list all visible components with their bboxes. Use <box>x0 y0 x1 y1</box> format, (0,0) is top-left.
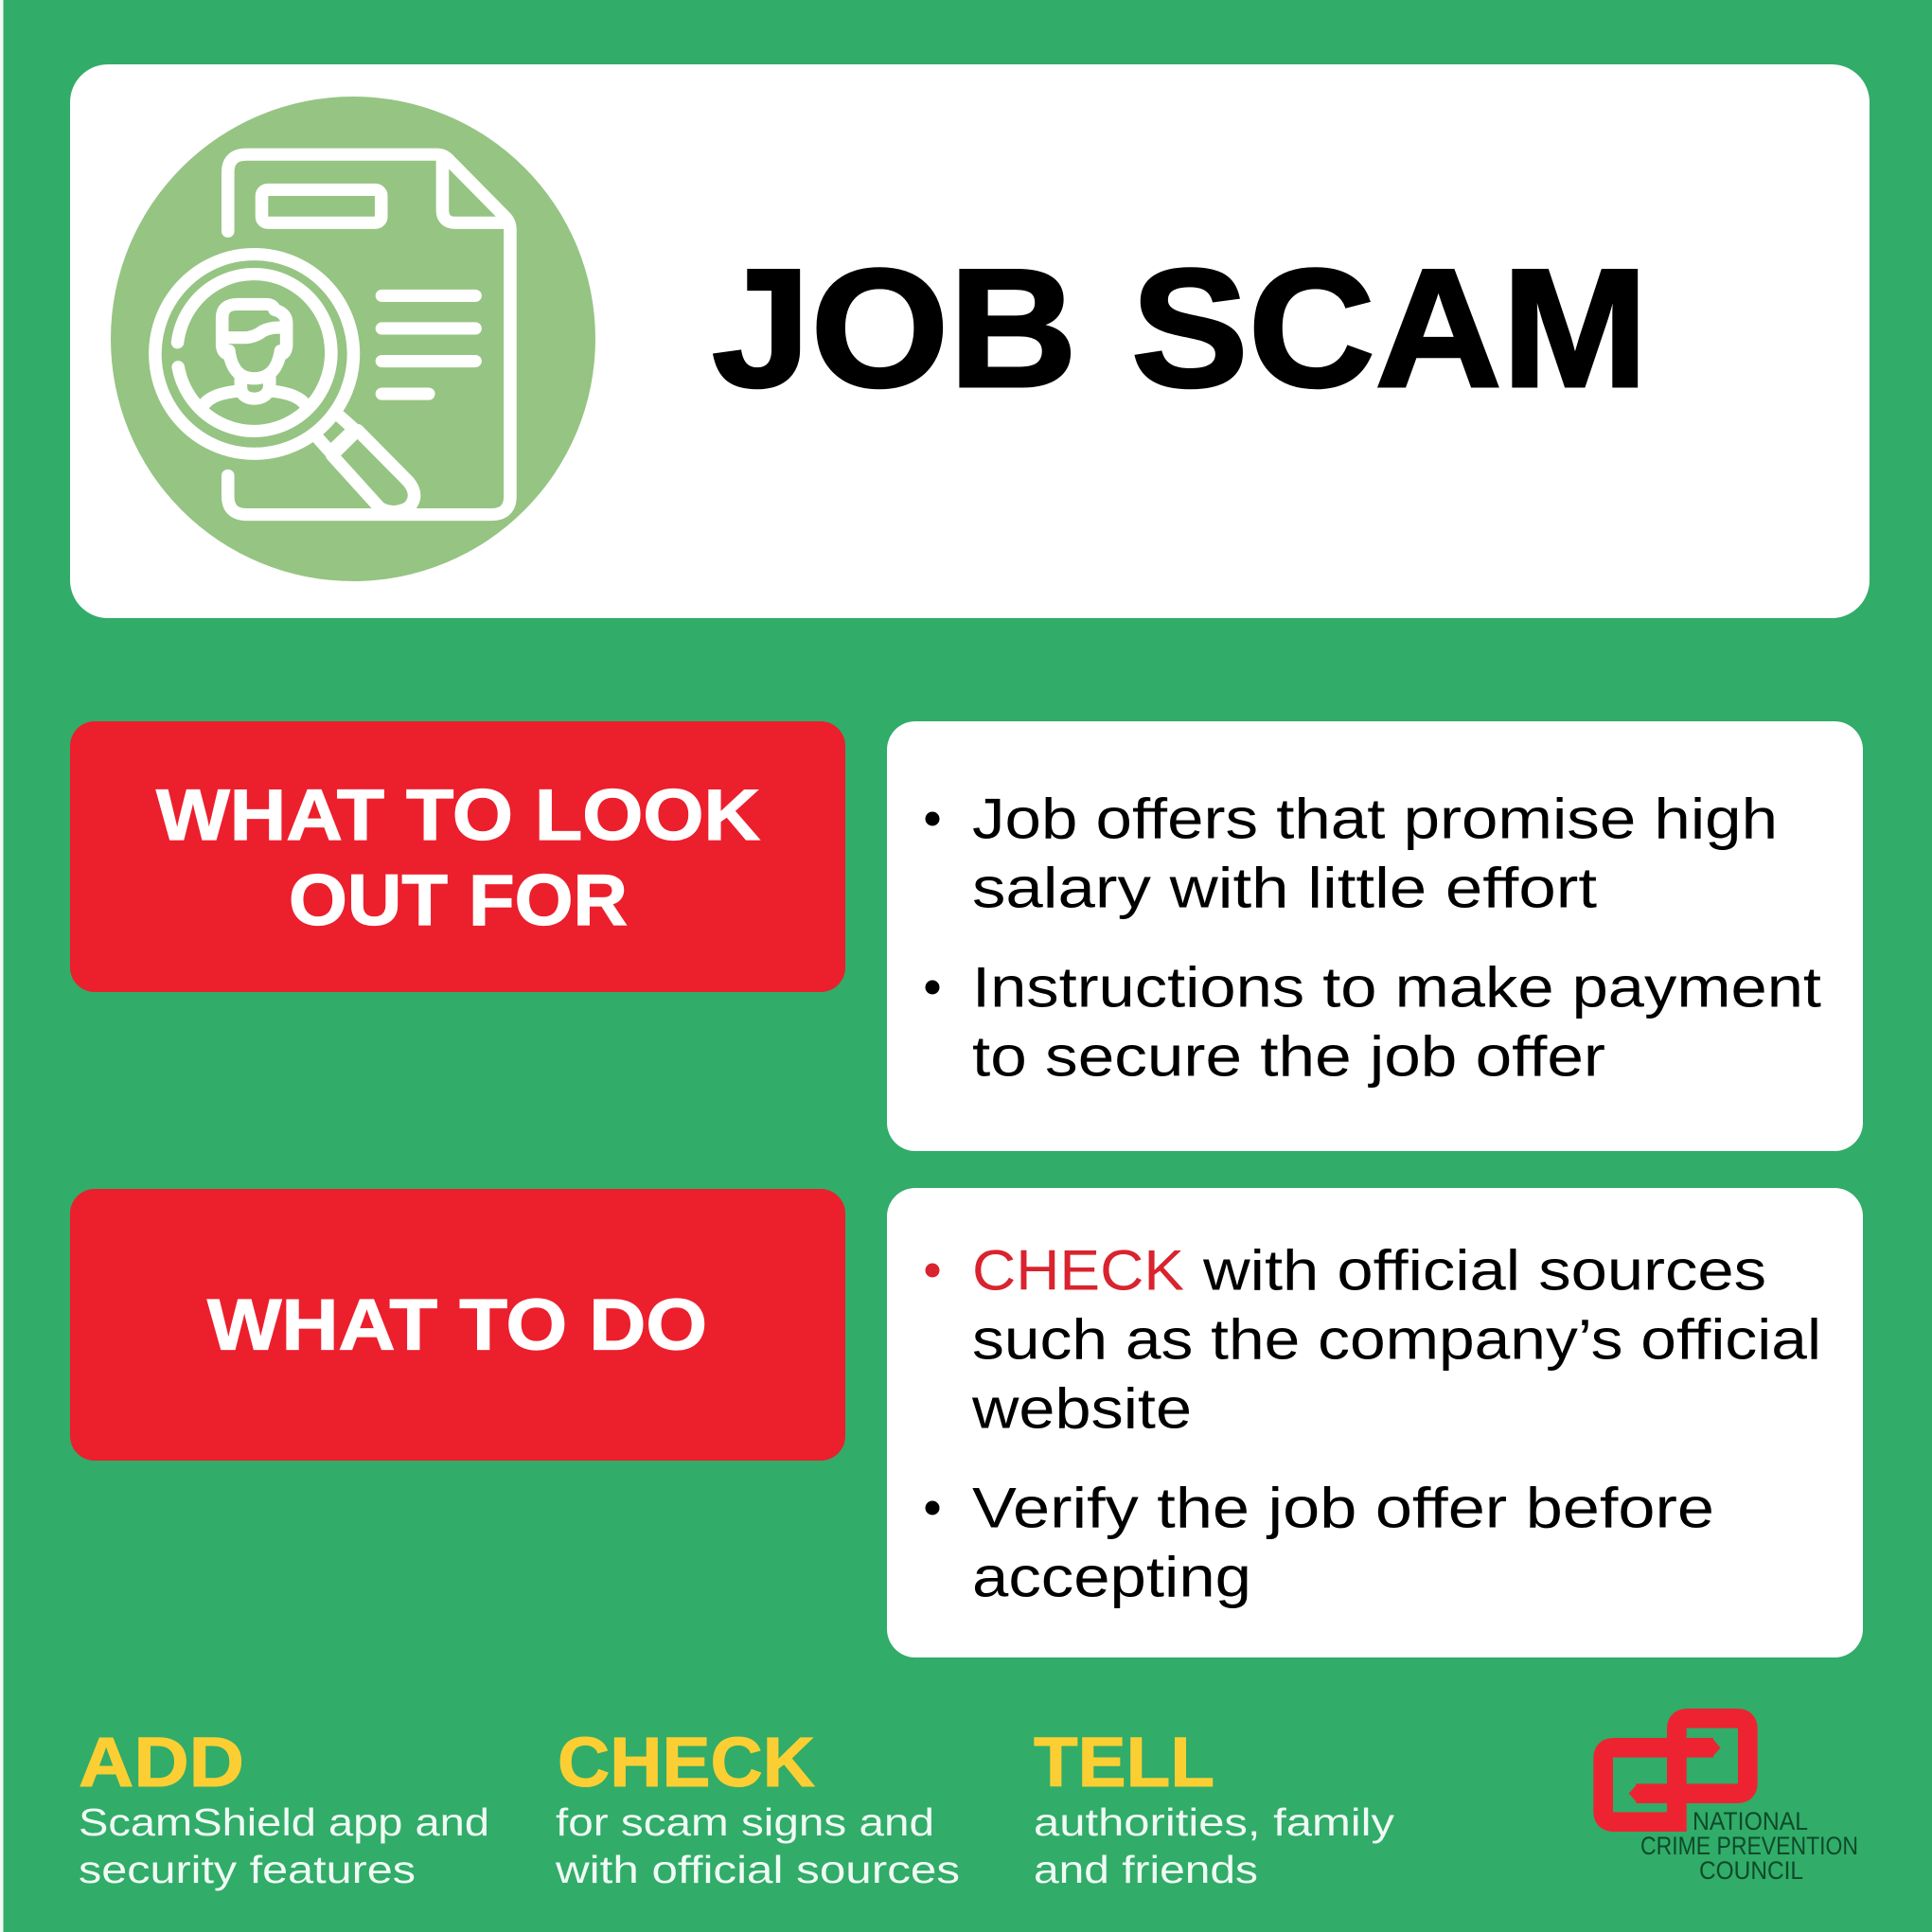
logo: National Crime Prevention Council: NATIONAL <box>1693 1807 1808 1835</box>
logo: National Crime Prevention Council: COUNCIL <box>1699 1856 1803 1885</box>
title: SCAM <box>1131 234 1648 422</box>
panel: what to do list: such as the company’s official <box>972 1308 1821 1371</box>
panel: what to look out for list: Instructions to make payment <box>972 956 1821 1019</box>
panel: what to look out for list: salary with little effort <box>972 856 1597 920</box>
panel: what to do list: accepting <box>972 1545 1251 1609</box>
panel: what to look out for label <box>70 721 845 992</box>
footer: add: security features <box>79 1848 416 1891</box>
logo: National Crime Prevention Council: CRIME PREVENTION <box>1640 1832 1858 1860</box>
panel: what to do list: CHECK <box>972 1238 1184 1303</box>
icon: document with magnifying glass over a person <box>111 97 595 581</box>
footer: check <box>555 1723 960 1891</box>
panel: what to do list: Verify the job offer before <box>972 1477 1714 1539</box>
footer: check: with official sources <box>555 1848 960 1891</box>
footer: tell: and friends <box>1034 1848 1258 1891</box>
footer: tell: TELL <box>1034 1723 1214 1801</box>
footer: check: for scam signs and <box>556 1800 934 1844</box>
footer: tell: authorities, family <box>1034 1800 1395 1844</box>
footer: add <box>79 1723 489 1891</box>
footer: tell <box>1034 1723 1395 1891</box>
panel: what to look out for list: Job offers that promise high <box>972 788 1778 850</box>
footer: check: CHECK <box>558 1723 815 1801</box>
title <box>712 234 1648 422</box>
panel: what to look out for list <box>887 721 1863 1151</box>
panel: what to look out for label: WHAT TO LOOK <box>156 775 760 856</box>
footer: add: ScamShield app and <box>79 1800 489 1844</box>
panel: what to do list: with official sources <box>1202 1238 1766 1303</box>
footer: add: ADD <box>79 1723 244 1801</box>
panel: header <box>70 64 1870 618</box>
logo: National Crime Prevention Council <box>1604 1718 1858 1885</box>
panel: what to look out for label: OUT FOR <box>289 860 628 941</box>
panel: what to look out for list: to secure the job offer <box>972 1024 1605 1089</box>
panel: what to do list: website <box>971 1376 1192 1441</box>
panel: what to do label: WHAT TO DO <box>207 1285 707 1365</box>
panel: what to do label <box>70 1189 845 1461</box>
title: JOB <box>712 234 1077 422</box>
panel: what to do list <box>887 1188 1863 1657</box>
